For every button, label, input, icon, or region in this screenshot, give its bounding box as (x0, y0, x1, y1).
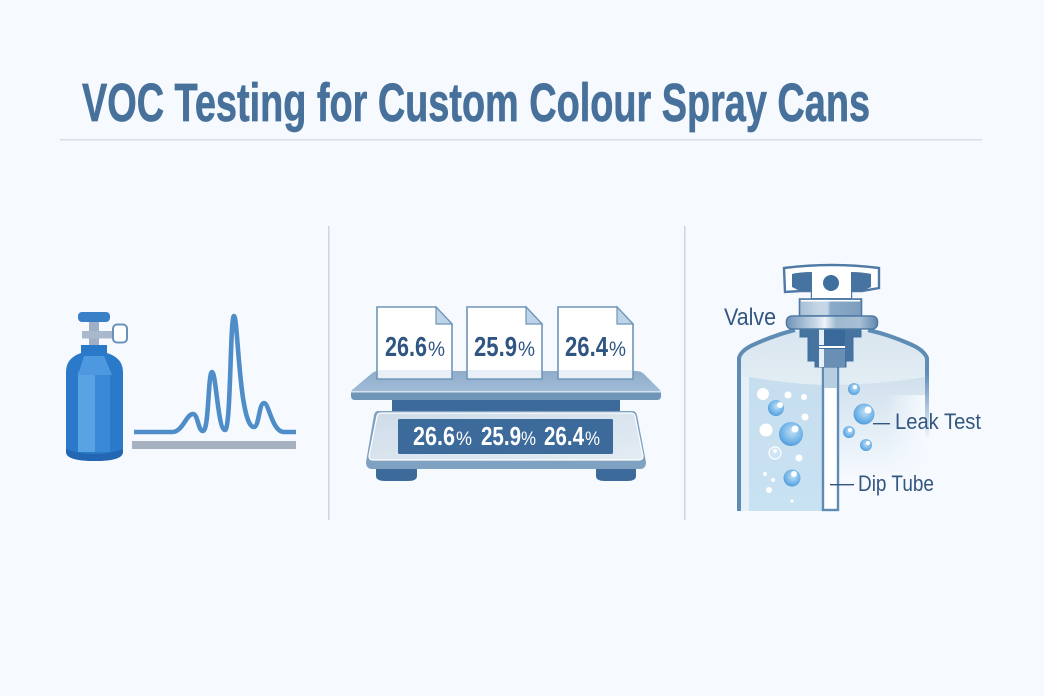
can liquid (741, 331, 926, 511)
scale platform (351, 371, 661, 412)
valve assembly (786, 299, 878, 367)
sample document 25.9%: % (518, 338, 535, 361)
scale display: % (585, 429, 600, 450)
valve actuator (784, 265, 879, 298)
scale display: % (521, 429, 536, 450)
sample document 26.6%: % (428, 338, 445, 361)
sample document 26.4%: 26.4 (565, 331, 608, 362)
bubbles (757, 383, 874, 502)
scale display: 25.9 (481, 421, 521, 451)
panel: spray can cutaway (724, 265, 981, 511)
scale base (366, 411, 646, 481)
chart baseline bar (132, 441, 296, 449)
sample document 26.4%: % (609, 338, 626, 361)
panel: gas chromatography (66, 312, 296, 461)
panel: scale with samples (351, 307, 661, 481)
label: Dip Tube (830, 471, 934, 496)
scale display: % (456, 429, 472, 450)
chart: chromatogram peaks (134, 316, 296, 432)
label: Leak Test: Leak Test (895, 409, 981, 434)
label: Valve: Valve (724, 304, 776, 331)
icon: gas cylinder (66, 312, 127, 461)
sample document 26.6% (377, 307, 452, 379)
sample document 26.6%: 26.6 (385, 331, 427, 362)
scale display: 26.4 (544, 421, 584, 451)
sample document 25.9%: 25.9 (474, 331, 517, 362)
label: Dip Tube: Dip Tube (858, 471, 934, 496)
can wall (739, 330, 927, 511)
sample document 25.9% (467, 307, 542, 379)
sample document 26.4% (558, 307, 633, 379)
scale display (398, 419, 613, 454)
dip tube (823, 365, 838, 510)
scale display: 26.6 (413, 421, 455, 451)
